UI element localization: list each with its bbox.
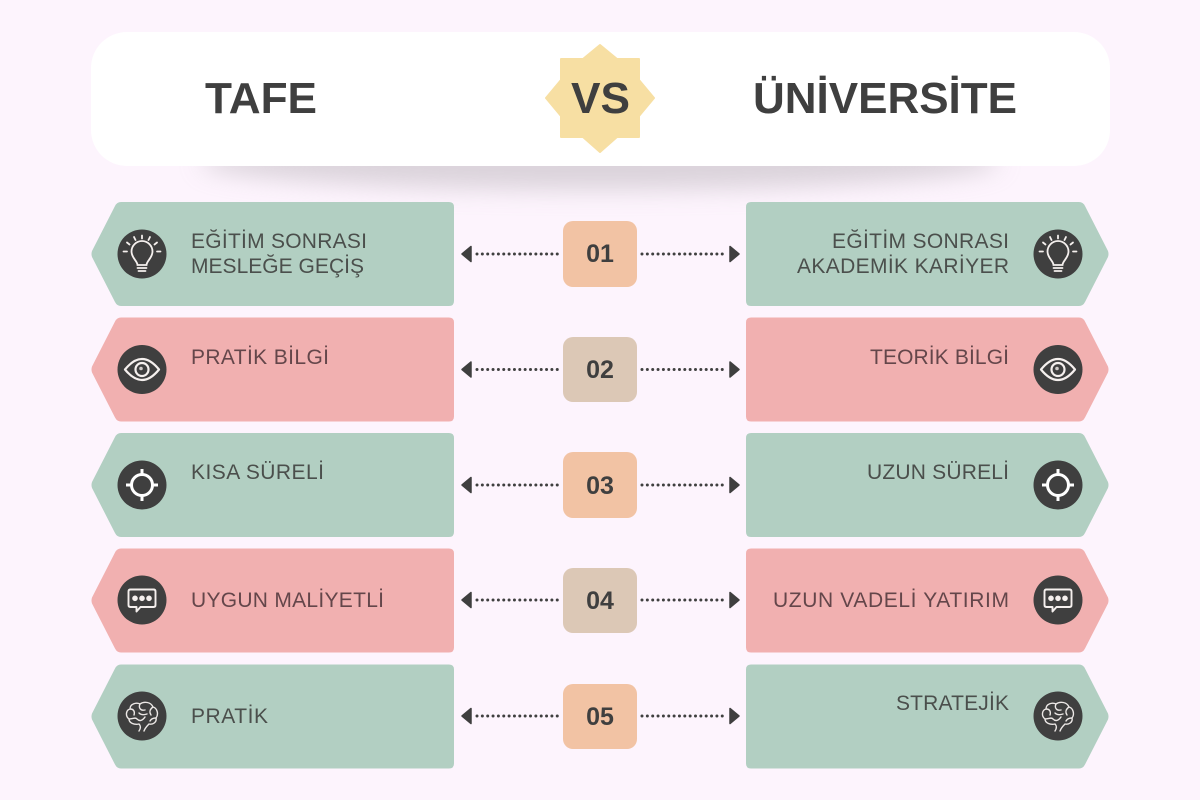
heading: TAFE: TAFE [205, 74, 317, 123]
label: pratik: PRATİK [191, 705, 268, 728]
row 04 arrows [462, 592, 739, 608]
row 03 number: 03 [586, 472, 614, 500]
icon: chat bubble [1034, 576, 1082, 624]
row 01 left panel [92, 202, 454, 306]
icon: chat bubble [118, 576, 166, 624]
row 05 number: 05 [586, 703, 614, 731]
icon: target [118, 460, 166, 510]
row 02 number [563, 337, 637, 402]
label: uzun vadeli yatırım: UZUN VADELİ YATIRIM [773, 589, 1009, 612]
icon: eye [118, 345, 166, 394]
badge: VS: VS [571, 74, 630, 123]
row 04 left panel [92, 548, 454, 652]
icon: light bulb [1034, 230, 1082, 278]
row 05 arrows [462, 708, 739, 724]
badge: VS [546, 45, 654, 152]
label: uzun süreli: UZUN SÜRELİ [867, 461, 1009, 484]
row 04 right panel [746, 548, 1108, 652]
icon: eye [1034, 345, 1082, 394]
icon: brain [1034, 692, 1082, 740]
header panel [91, 32, 1110, 166]
label: stratejik: STRATEJİK [896, 692, 1009, 715]
row 03 left panel [92, 433, 454, 537]
row 03 arrows [462, 478, 739, 492]
row 05 right panel [746, 664, 1108, 768]
label: teorik bilgi: TEORİK BİLGİ [870, 346, 1009, 369]
icon: brain [118, 692, 166, 740]
row 04 number [563, 568, 637, 633]
row 01 number: 01 [586, 240, 614, 268]
row 03 right panel [746, 433, 1108, 537]
label: mesleğe geçiş: MESLEĞE GEÇİŞ [191, 255, 364, 278]
row 05 number [563, 684, 637, 749]
row 01 number [563, 221, 637, 287]
label: mesleğe geçiş: EĞİTİM SONRASI [191, 230, 367, 253]
label: akademik kariyer: EĞİTİM SONRASI [832, 230, 1009, 253]
row 01 arrows [462, 246, 739, 262]
row 02 left panel [92, 318, 454, 422]
label: kısa süreli: KISA SÜRELİ [191, 461, 324, 484]
heading: ÜNİVERSİTE: ÜNİVERSİTE [753, 74, 1017, 123]
icon: target [1034, 460, 1082, 510]
row 02 right panel [746, 318, 1108, 422]
icon: light bulb [118, 230, 166, 278]
row 03 number [563, 452, 637, 518]
label: uygun maliyetli: UYGUN MALİYETLİ [191, 589, 384, 612]
row 04 number: 04 [586, 587, 614, 615]
row 02 number: 02 [586, 356, 614, 384]
row 01 right panel [746, 202, 1108, 306]
row 02 arrows [462, 362, 739, 377]
header shadow [200, 134, 1000, 190]
label: akademik kariyer: AKADEMİK KARİYER [797, 255, 1009, 278]
label: pratik bilgi: PRATİK BİLGİ [191, 346, 329, 369]
row 05 left panel [92, 664, 454, 768]
